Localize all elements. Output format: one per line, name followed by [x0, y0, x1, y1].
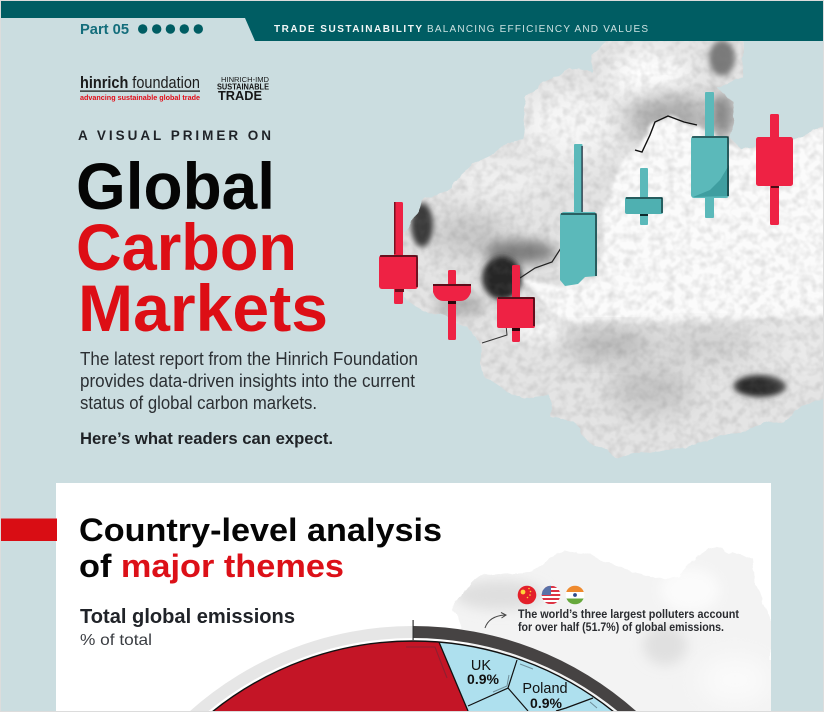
label: Poland: 0.9%	[530, 695, 563, 711]
label: UK	[467, 658, 500, 687]
candle 3 red	[497, 265, 535, 342]
outer grey ring	[189, 626, 413, 712]
candle 6 teal	[691, 92, 729, 218]
arrow	[485, 612, 506, 628]
section heading: Country-level analysis	[79, 512, 442, 548]
callout text	[518, 609, 739, 634]
logo: sustainable trade index: TRADE	[218, 88, 262, 103]
header section label: TRADE SUSTAINABILITY	[274, 24, 422, 35]
header bar	[0, 1, 824, 41]
logo: sustainable trade index: SUSTAINABLE	[217, 82, 269, 92]
logo: sustainable trade index: HINRICH-IMD	[221, 75, 270, 84]
foreground white cloud lobe	[523, 116, 824, 322]
logo: sustainable trade index	[217, 75, 270, 103]
section heading	[79, 512, 442, 584]
candle 7 red	[756, 114, 793, 225]
candle 4 teal	[560, 144, 597, 286]
chart title: Total global emissions	[80, 606, 295, 628]
intro text: status of global carbon markets.	[80, 393, 317, 413]
chart unit: % of total	[80, 632, 152, 649]
logo: hinrich foundation	[80, 73, 200, 102]
section heading: of major themes	[79, 548, 344, 584]
icon: India flag	[566, 586, 584, 604]
title: Markets	[78, 271, 328, 345]
top-three share arc	[413, 626, 637, 712]
intro text: provides data-driven insights into the current	[80, 371, 415, 391]
cloud illustration	[395, 36, 824, 466]
callout: three largest polluters	[485, 585, 739, 634]
candle 1 red	[379, 202, 418, 304]
label: Poland: Poland	[522, 681, 568, 697]
icon: USA flag	[542, 586, 560, 604]
kicker: A VISUAL PRIMER ON	[78, 128, 271, 143]
title	[76, 149, 328, 345]
icon: China flag	[517, 585, 537, 605]
blue segments	[212, 641, 614, 712]
panel background cloud	[450, 545, 771, 712]
candlestick chart	[379, 92, 793, 342]
logo: hinrich foundation: advancing sustainable global trade	[80, 93, 200, 102]
label: UK: 0.9%	[467, 671, 500, 687]
header subtitle: BALANCING EFFICIENCY AND VALUES	[427, 24, 648, 35]
emissions wheel chart	[189, 620, 637, 712]
candle 5 teal	[625, 168, 663, 225]
callout text: for over half (51.7%) of global emissions.	[518, 622, 724, 634]
part indicator	[80, 21, 203, 38]
red segment	[212, 641, 468, 712]
intro text: The latest report from the Hinrich Foundation	[80, 349, 418, 369]
intro text	[80, 349, 418, 413]
title: Global	[76, 149, 275, 223]
label: UK: UK	[471, 658, 491, 674]
part indicator: Part 05	[80, 21, 129, 38]
logo: hinrich foundation: hinrich foundation	[80, 73, 200, 92]
callout text: The world’s three largest polluters account	[518, 609, 739, 621]
call to read: Here’s what readers can expect.	[80, 429, 333, 448]
title: Carbon	[76, 210, 297, 284]
panel: country-level analysis	[1, 483, 771, 712]
candle 2 red	[433, 270, 471, 340]
label: Poland	[522, 681, 568, 711]
